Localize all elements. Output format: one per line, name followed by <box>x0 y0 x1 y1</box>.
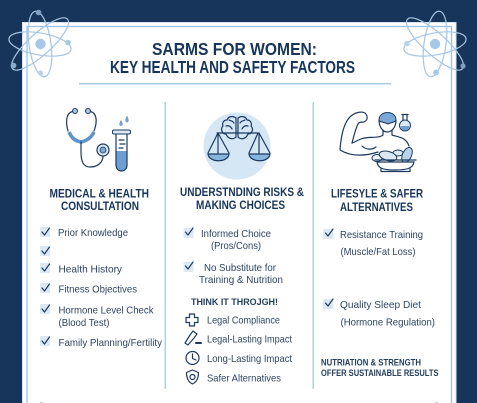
checklist: Prior Knowledge <box>58 227 128 239</box>
checklist: (Muscle/Fat Loss) <box>340 246 416 258</box>
title: KEY HEALTH AND SAFETY FACTORS <box>110 57 355 77</box>
checklist <box>323 229 435 328</box>
checklist: Fitness Objectives <box>58 284 137 296</box>
heading: UNDERSTNDING RISKS & <box>180 187 304 199</box>
heading: MAKING CHOICES <box>196 200 285 212</box>
icon: test tube <box>112 116 130 171</box>
checklist: Informed Choice <box>201 228 271 240</box>
heading: CONSULTATION <box>61 201 139 213</box>
checklist: Hormone Level Check <box>58 304 154 316</box>
icon: gavel <box>185 331 201 345</box>
checklist: (Pros/Cons) <box>211 240 261 252</box>
think it through list: Legal Compliance <box>207 314 280 326</box>
icon: brain on scales <box>204 112 270 180</box>
think it through list: Safer Alternatives <box>207 372 281 384</box>
checklist: Quality Sleep Diet <box>340 299 421 311</box>
icon: clock <box>186 352 199 364</box>
heading: ALTERNATIVES <box>340 202 413 214</box>
icon: stethoscope <box>67 108 109 167</box>
callout: OFFER SUSTAINABLE RESULTS <box>321 368 438 379</box>
think it through list <box>185 297 292 384</box>
checklist: (Blood Test) <box>58 317 110 329</box>
icon: shield <box>186 370 198 384</box>
checklist: Training & Nutrition <box>199 274 283 286</box>
checklist: (Hormone Regulation) <box>340 316 435 328</box>
heading <box>180 187 304 212</box>
heading: MEDICAL & HEALTH <box>50 188 149 200</box>
checklist <box>184 228 283 286</box>
checklist: Family Planning/Fertility <box>58 337 163 349</box>
icon: cross <box>186 314 198 326</box>
checklist: Resistance Training <box>340 229 423 241</box>
icon: atom top right <box>400 10 470 78</box>
checklist: No Substitute for <box>204 262 276 274</box>
title <box>110 39 355 77</box>
panel: lifestyle and safer alternatives <box>321 112 438 379</box>
checklist <box>40 227 163 349</box>
panel: understanding risks and making choices <box>180 112 304 384</box>
think it through list: Long-Lasting Impact <box>207 353 292 365</box>
icon: flexing figure with food bowl <box>340 112 416 172</box>
checklist: Health History <box>58 264 123 276</box>
heading: LIFESYLE & SAFER <box>331 188 424 200</box>
think it through list: Legal-Lasting Impact <box>207 334 292 346</box>
title: SARMS FOR WOMEN: <box>152 39 317 59</box>
icon: atom top left <box>5 10 75 78</box>
heading <box>50 188 149 213</box>
callout: NUTRIATION & STRENGTH <box>321 358 421 368</box>
callout <box>321 358 438 379</box>
panel: medical and health consultation <box>40 108 163 349</box>
heading <box>331 188 424 214</box>
icon: flask <box>400 114 410 131</box>
think it through list: THINK IT THROJGH! <box>191 297 278 308</box>
